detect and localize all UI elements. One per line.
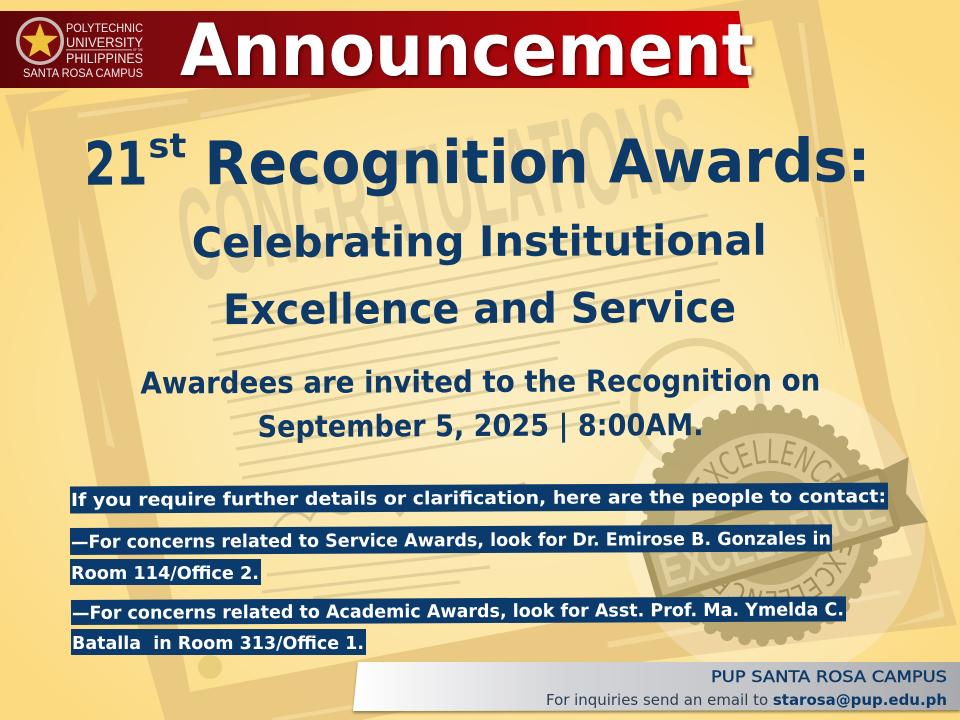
service awards contact: —For concerns related to Service Awards, look for Dr. Emirose B. Gonzales in: [71, 528, 831, 553]
university name: PHILIPPINES: [66, 50, 143, 66]
university name: POLYTECHNIC: [66, 21, 143, 35]
contact intro line: If you require further details or clarification, here are the people to contact:: [71, 486, 886, 511]
seal scalloped edge: [647, 410, 877, 640]
excellence seal: [625, 380, 928, 662]
pale ring behind seal: [634, 342, 760, 468]
service awards contact: [70, 524, 832, 585]
invitation lines: Awardees are invited to the Recognition on: [140, 364, 820, 401]
footer inquiries line: For inquiries send an email to starosa@pup.edu.ph: [546, 691, 947, 709]
heading line: 21st Recognition Awards: st: [148, 126, 186, 166]
certificate text lines: [208, 215, 720, 598]
paper dot: [198, 655, 222, 679]
subheading lines: [192, 216, 767, 334]
pale halo circle: [625, 380, 925, 680]
university logo: [16, 17, 64, 65]
university name: [23, 21, 144, 80]
announcement title: Announcement: [180, 8, 754, 92]
academic awards contact: Batalla in Room 313/Office 1.: [72, 633, 364, 654]
frame corner sliver: [5, 90, 70, 152]
header bar: [0, 8, 754, 92]
invitation lines: [140, 364, 821, 445]
heading line: 21st Recognition Awards: 21: [84, 129, 148, 200]
university name: UNIVERSITY: [66, 34, 144, 50]
academic awards contact: [71, 596, 846, 655]
university name: SANTA ROSA CAMPUS: [23, 66, 143, 80]
academic awards contact: —For concerns related to Academic Awards, look for Asst. Prof. Ma. Ymelda C.: [72, 599, 844, 624]
subheading lines: Celebrating Institutional: [192, 216, 767, 267]
footer bar: [353, 662, 960, 711]
seal ring word bottom: EXCELLENCE: [712, 546, 852, 597]
invitation lines: September 5, 2025 | 8:00AM.: [257, 408, 704, 445]
service awards contact: Room 114/Office 2.: [71, 563, 259, 584]
university name: OF THE: [133, 48, 144, 52]
footer campus name: PUP SANTA ROSA CAMPUS: [711, 667, 947, 686]
signature scribble: [270, 483, 525, 535]
heading line: 21st Recognition Awards: Recognition Awards:: [204, 126, 871, 199]
seal ring word top: EXCELLENCE: [694, 438, 844, 484]
subheading lines: Excellence and Service: [223, 283, 736, 334]
contact information block: [70, 483, 888, 655]
main heading: [84, 123, 872, 446]
